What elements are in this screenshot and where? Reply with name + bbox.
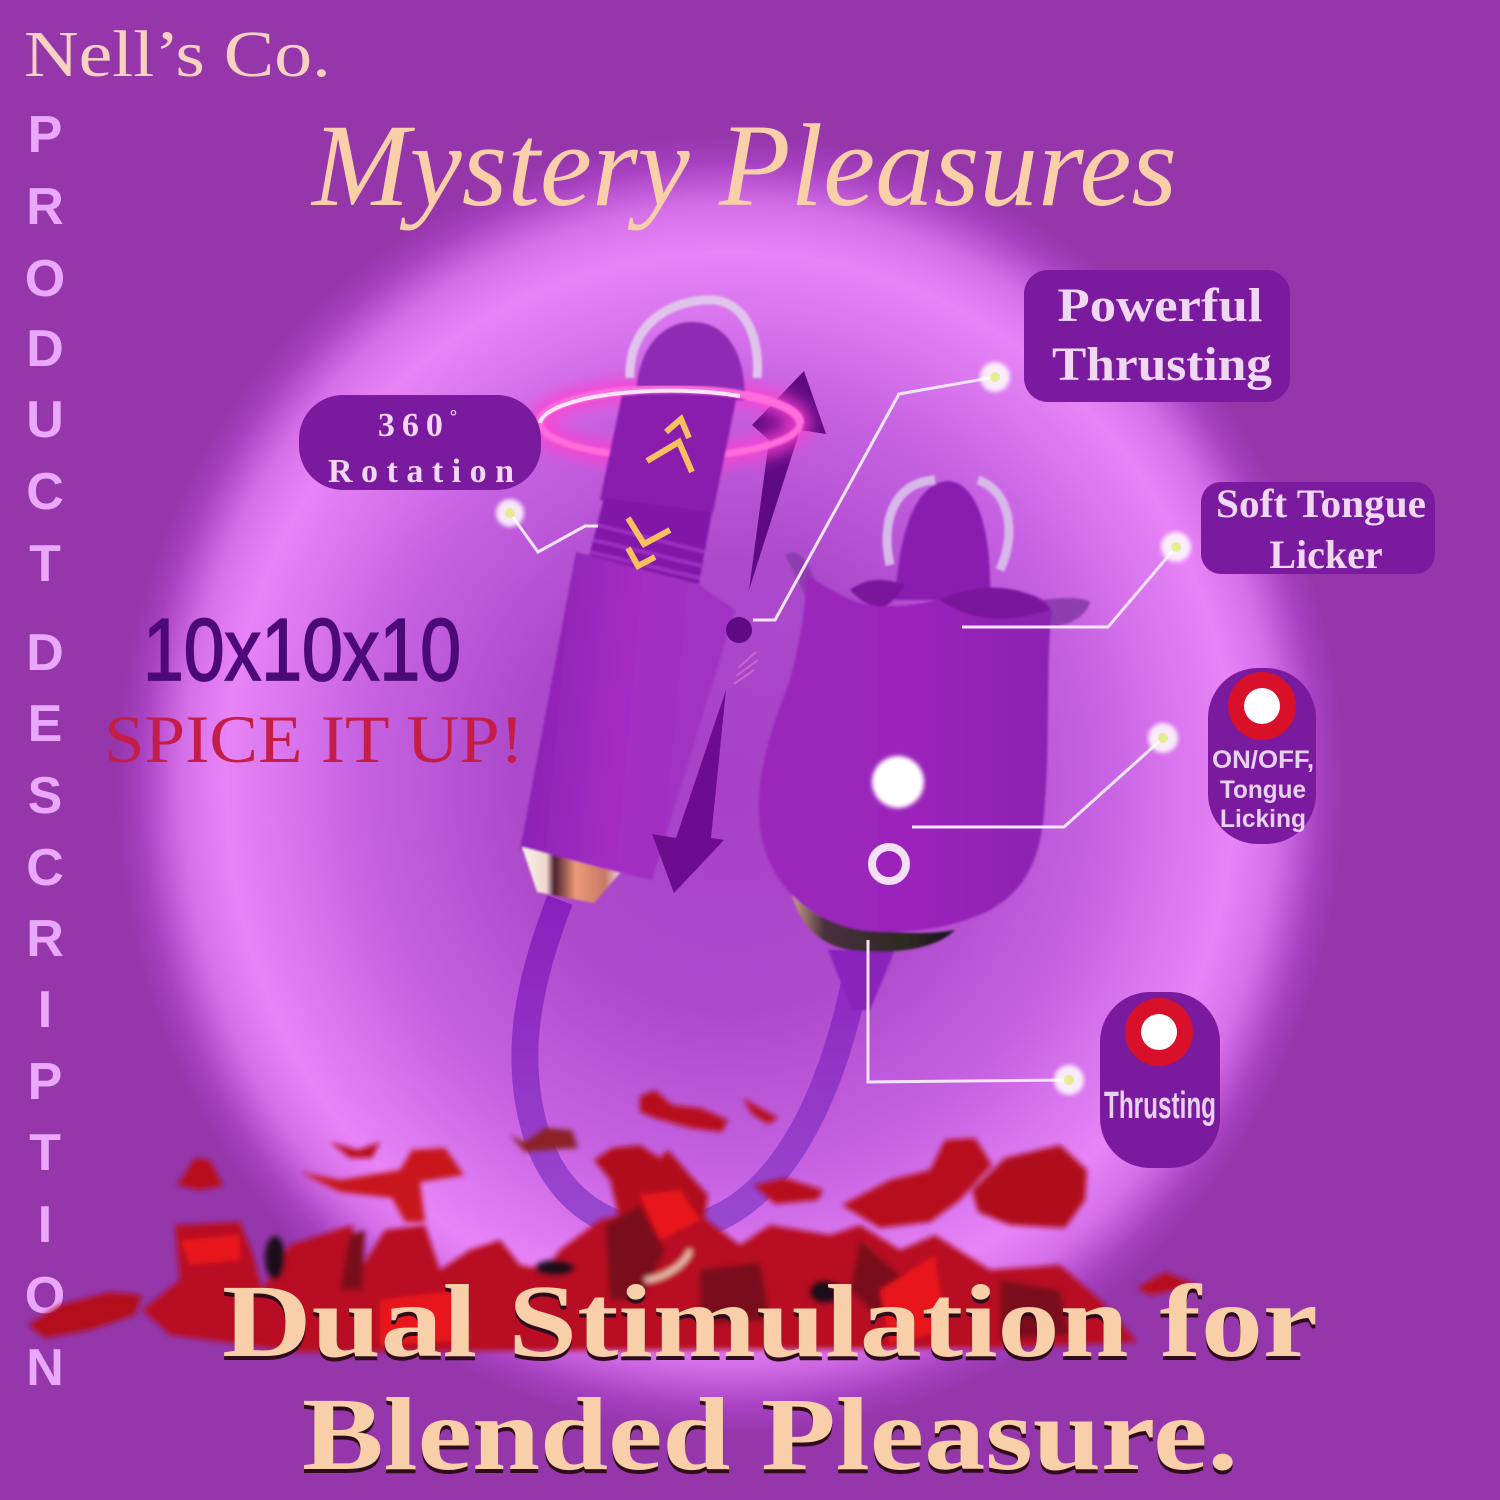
vertical label: product description — [25, 106, 65, 1397]
callout: on/off tongue licking: ON/OFF, — [1212, 746, 1314, 774]
rose head — [759, 574, 1052, 932]
wand product — [520, 300, 758, 903]
callout: 360 rotation: Rotation — [328, 453, 514, 490]
vertical label: product description: I — [38, 981, 52, 1039]
background glow — [115, 135, 1345, 1435]
callout: on/off tongue licking: Licking — [1220, 805, 1306, 833]
callout: on/off tongue licking: Tongue — [1220, 776, 1306, 804]
vertical label: product description: O — [25, 250, 65, 308]
chevrons up — [647, 419, 692, 472]
petal mass — [142, 1210, 1137, 1352]
wand tip motion arc — [630, 300, 758, 378]
vertical label: product description: C — [26, 839, 64, 897]
callout: on/off tongue licking — [1208, 668, 1316, 844]
callout: 360 rotation: 360 — [378, 407, 450, 444]
callout: 360 rotation — [299, 395, 541, 490]
leader: rotation — [496, 499, 598, 552]
vertical label: product description: C — [26, 463, 64, 521]
ribbed section — [588, 498, 712, 588]
callout: thrusting button: Thrusting — [1104, 1085, 1216, 1127]
callout: thrusting button — [1100, 992, 1220, 1168]
rose base — [792, 895, 955, 952]
vertical label: product description: R — [26, 910, 64, 968]
petal highlights — [180, 1190, 945, 1345]
headline: Blended Pleasure. — [302, 1381, 1238, 1496]
headline: Dual Stimulation for — [222, 1264, 1318, 1379]
vertical label: product description: D — [26, 320, 64, 378]
callout: powerful thrusting — [1024, 270, 1290, 402]
callout: 360 rotation: ° — [450, 406, 464, 426]
rotation ring front — [540, 389, 800, 423]
leader: thrusting button — [868, 940, 1084, 1095]
petal shadows — [340, 1205, 1070, 1340]
callout: soft tongue licker: Soft Tongue — [1216, 481, 1426, 526]
lower body — [520, 552, 735, 880]
callout: powerful thrusting: Thrusting — [1052, 338, 1272, 391]
tongue — [895, 481, 990, 600]
stem — [828, 950, 895, 1010]
vertical label: product description: O — [25, 1267, 65, 1325]
leader: thrusting — [753, 362, 1010, 620]
rose inner lip — [850, 580, 1050, 619]
vertical label: product description: R — [26, 178, 64, 236]
callout: powerful thrusting: Powerful — [1058, 279, 1262, 332]
power button — [872, 756, 924, 808]
slogan: SPICE IT UP! — [104, 701, 524, 777]
vertical label: product description: U — [26, 391, 64, 449]
headline: Dual Stimulation for — [222, 1268, 1318, 1383]
headline — [222, 1264, 1318, 1496]
vertical label: product description: T — [29, 535, 61, 593]
gold collar — [522, 847, 620, 903]
leader: tongue — [962, 532, 1191, 627]
vertical label: product description: P — [28, 1053, 62, 1111]
thrust arrow: up — [749, 371, 826, 590]
left leaf — [785, 552, 815, 595]
tongue motion arcs — [887, 480, 1009, 570]
vertical label: product description: S — [28, 767, 62, 825]
size text: 10x10x10 — [143, 600, 461, 699]
right leaf — [1040, 598, 1090, 626]
petal curl — [645, 1250, 690, 1280]
cable — [525, 900, 862, 1230]
title: Mystery Pleasures — [310, 100, 1177, 231]
vertical label: product description: P — [28, 106, 62, 164]
ring button — [872, 847, 906, 881]
upper shaft — [600, 395, 737, 512]
rose product — [759, 480, 1090, 1010]
vertical label: product description: E — [28, 695, 62, 753]
callout: soft tongue licker: Licker — [1269, 532, 1383, 577]
rose petals — [28, 1090, 1198, 1352]
thrust arrow: down and dot — [652, 617, 758, 893]
vertical label: product description: T — [29, 1124, 61, 1182]
rotation ring back — [540, 389, 800, 457]
headline: Blended Pleasure. — [302, 1377, 1238, 1492]
vertical label: product description: D — [26, 624, 64, 682]
dark petal spots — [265, 1236, 841, 1304]
wand tip — [636, 322, 745, 400]
leader: on/off — [912, 723, 1178, 827]
callout: soft tongue licker — [1201, 481, 1435, 577]
vertical label: product description: N — [26, 1339, 64, 1397]
brand name: Nell’s Co. — [24, 18, 331, 91]
ribs — [590, 525, 705, 578]
chevrons down — [628, 518, 670, 566]
vertical label: product description: I — [38, 1196, 52, 1254]
scattered petals — [28, 1090, 1198, 1338]
